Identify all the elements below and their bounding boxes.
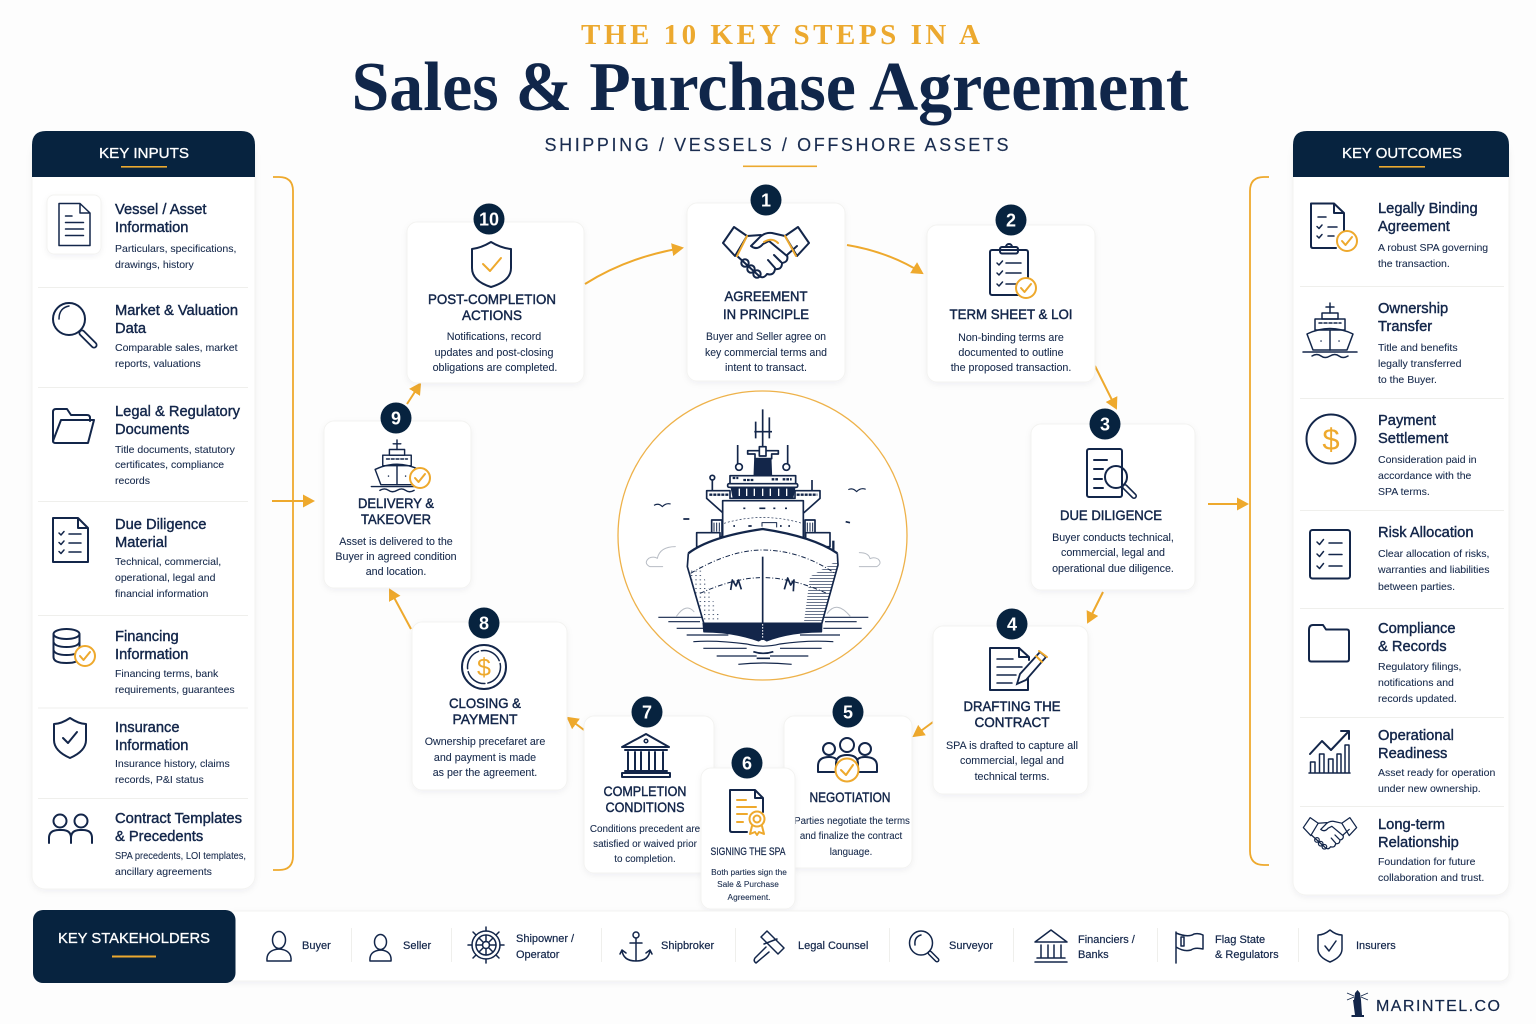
- input: market valuation data: [53, 303, 238, 370]
- step 4: drafting the contract: DRAFTING THE: [964, 698, 1060, 714]
- inputs header: [32, 131, 255, 177]
- title block: [352, 19, 1188, 167]
- input: due diligence material: Technical, commercial,: [115, 556, 221, 568]
- step 9: delivery and takeover: TAKEOVER: [361, 511, 431, 527]
- input: due diligence material: operational, legal and: [115, 572, 216, 584]
- outcome: compliance records: Regulatory filings,: [1378, 661, 1461, 673]
- outcome: compliance records: [1309, 621, 1461, 705]
- stakeholder: financiers banks: Financiers /: [1078, 934, 1136, 946]
- step 3: due diligence: 3: [1100, 414, 1110, 434]
- stakeholder: seller: [370, 934, 431, 961]
- icon: coin: $: [477, 654, 491, 682]
- step 7: completion conditions: CONDITIONS: [606, 799, 684, 815]
- outcome: legally binding agreement: Agreement: [1378, 219, 1450, 235]
- step 6: signing the spa: 6: [742, 754, 752, 774]
- icon: bank building: [622, 734, 670, 777]
- step 5: negotiation: Parties negotiate the terms: [794, 816, 910, 827]
- main title: Sales & Purchase Agreement: [352, 49, 1188, 126]
- step 4: drafting the contract: 4: [1007, 614, 1017, 634]
- input: insurance information: Insurance: [115, 720, 180, 736]
- stakeholder: flag state regulators: Flag State: [1215, 934, 1265, 946]
- step 2: term sheet and loi: the proposed transaction.: [951, 362, 1071, 374]
- outcomes header: KEY OUTCOMES: [1342, 146, 1462, 162]
- step 9: delivery and takeover: 9: [391, 408, 401, 428]
- input: insurance information: records, P&I status: [115, 774, 204, 786]
- outcome: operational readiness: Operational: [1378, 728, 1454, 744]
- stakeholder: shipowner operator: Shipowner /: [516, 933, 575, 945]
- stakeholders label: [33, 910, 236, 983]
- arrow: step 2 to 3: [1095, 366, 1116, 408]
- arrow: step 9 to 10: [407, 384, 420, 404]
- input: vessel asset information: Information: [115, 220, 188, 236]
- outcome: legally binding agreement: Legally Binding: [1378, 201, 1478, 217]
- step 7: completion conditions: [584, 696, 714, 873]
- outcome: long-term relationship: Long-term: [1378, 817, 1445, 833]
- icon: shield check: [472, 242, 511, 287]
- outcome: payment settlement: Consideration paid in: [1378, 454, 1477, 466]
- input: due diligence material: Material: [115, 535, 167, 551]
- step 1: agreement in principle: 1: [761, 190, 771, 210]
- step 2: term sheet and loi: [927, 204, 1095, 382]
- step 3: due diligence: operational due diligence.: [1052, 563, 1174, 575]
- outcome: ownership transfer: legally transferred: [1378, 358, 1462, 370]
- step 10: post-completion actions: updates and post-closing: [435, 347, 553, 359]
- outcome: ownership transfer: to the Buyer.: [1378, 374, 1437, 386]
- input: legal regulatory documents: records: [115, 475, 150, 487]
- stakeholder: legal counsel: Legal Counsel: [798, 940, 868, 952]
- input: legal regulatory documents: Title documents, statutory: [115, 444, 236, 456]
- step 2: term sheet and loi: TERM SHEET & LOI: [950, 306, 1072, 322]
- outcome: ownership transfer: Ownership: [1378, 301, 1448, 317]
- outcome: compliance records: notifications and: [1378, 677, 1454, 689]
- input: vessel asset information: [47, 195, 236, 271]
- icon: group with check: [818, 738, 877, 782]
- input: vessel asset information: Vessel / Asset: [115, 202, 206, 218]
- step 9: delivery and takeover: [324, 402, 471, 588]
- stakeholder: shipbroker: [620, 932, 715, 961]
- step 8: closing and payment: PAYMENT: [452, 711, 518, 727]
- input: legal regulatory documents: [53, 404, 241, 487]
- outcome: payment settlement: Payment: [1378, 413, 1436, 429]
- step 2: term sheet and loi: Non-binding terms are: [958, 332, 1064, 344]
- step 3: due diligence: DUE DILIGENCE: [1060, 507, 1162, 523]
- input: legal regulatory documents: certificates, compliance: [115, 459, 224, 471]
- step 6: signing the spa: [701, 748, 795, 909]
- logo: marintel: [1347, 990, 1500, 1017]
- step 8: closing and payment: Ownership precefaret are: [425, 736, 545, 748]
- stakeholder: insurers: [1318, 930, 1396, 962]
- stakeholder: surveyor: [910, 931, 993, 960]
- step 9: delivery and takeover: Buyer in agreed condition: [335, 551, 457, 563]
- step 5: negotiation: 5: [843, 702, 853, 722]
- step 5: negotiation: language.: [830, 847, 872, 858]
- input: legal regulatory documents: Legal & Regulatory: [115, 404, 241, 420]
- step 1: agreement in principle: key commercial terms and: [705, 347, 827, 359]
- step 5: negotiation: and finalize the contract: [800, 831, 902, 842]
- arrow: step 1 to 2: [847, 245, 922, 273]
- input: financing information: Information: [115, 647, 188, 663]
- bracket: process to outcomes: [1208, 177, 1269, 865]
- step 10: post-completion actions: obligations are completed.: [433, 362, 557, 374]
- input: due diligence material: [53, 517, 221, 600]
- step 7: completion conditions: to completion.: [614, 854, 676, 865]
- panel: key outcomes: [1293, 131, 1509, 895]
- icon: handshake: [723, 227, 809, 278]
- step 6: signing the spa: Both parties sign the: [711, 867, 787, 877]
- step 2: term sheet and loi: 2: [1006, 210, 1016, 230]
- outcome: payment settlement: SPA terms.: [1378, 486, 1430, 498]
- stakeholder: flag state regulators: & Regulators: [1215, 949, 1279, 961]
- step 10: post-completion actions: 10: [479, 210, 499, 230]
- icon: coin: [462, 645, 506, 689]
- stakeholder: shipowner operator: [468, 927, 575, 963]
- step 7: completion conditions: satisfied or waived prior: [593, 839, 698, 850]
- step 6: signing the spa: Agreement.: [728, 892, 770, 902]
- step 1: agreement in principle: IN PRINCIPLE: [723, 306, 809, 322]
- subtitle: SHIPPING / VESSELS / OFFSHORE ASSETS: [544, 135, 1008, 155]
- step 10: post-completion actions: Notifications, record: [447, 331, 541, 343]
- input: contract templates precedents: [49, 811, 246, 878]
- input: market valuation data: Data: [115, 321, 147, 337]
- input: financing information: Financing terms, bank: [115, 668, 219, 680]
- step 8: closing and payment: 8: [479, 614, 489, 634]
- icon: ship with check: [371, 440, 430, 492]
- outcome: legally binding agreement: A robust SPA governing: [1378, 242, 1488, 254]
- step 8: closing and payment: [412, 608, 567, 790]
- central ship illustration: [618, 391, 907, 680]
- panel: key inputs: [32, 131, 255, 889]
- step 6: signing the spa: SIGNING THE SPA: [710, 846, 786, 858]
- outcome: legally binding agreement: [1311, 201, 1488, 270]
- input: vessel asset information: drawings, history: [115, 259, 195, 271]
- arrow: step 8 to 9: [390, 590, 411, 629]
- outcome: compliance records: Compliance: [1378, 621, 1456, 637]
- step 7: completion conditions: Conditions precedent are: [590, 824, 701, 835]
- input: contract templates precedents: ancillary agreements: [115, 866, 212, 878]
- input: contract templates precedents: & Precedents: [115, 829, 203, 845]
- input: legal regulatory documents: Documents: [115, 422, 189, 438]
- step 5: negotiation: [784, 696, 912, 868]
- step 7: completion conditions: COMPLETION: [604, 783, 686, 799]
- step 4: drafting the contract: [933, 608, 1088, 794]
- inputs header: KEY INPUTS: [99, 146, 189, 162]
- outcome: long-term relationship: Foundation for future: [1378, 856, 1476, 868]
- input: due diligence material: Due Diligence: [115, 517, 206, 533]
- logo: marintel: MARINTEL.CO: [1376, 998, 1500, 1015]
- step 8: closing and payment: as per the agreement.: [433, 767, 537, 779]
- stakeholder: legal counsel: [754, 931, 868, 963]
- input: market valuation data: reports, valuations: [115, 358, 201, 370]
- outcome: long-term relationship: Relationship: [1378, 835, 1459, 851]
- outcome: risk allocation: Clear allocation of risks,: [1378, 548, 1489, 560]
- icon: certificate document: [730, 790, 764, 835]
- stakeholder: financiers banks: Banks: [1078, 949, 1109, 961]
- outcome: risk allocation: warranties and liabilities: [1377, 564, 1489, 576]
- input: due diligence material: financial information: [115, 588, 209, 600]
- outcome: operational readiness: under new ownership.: [1378, 783, 1481, 795]
- step 10: post-completion actions: POST-COMPLETION: [428, 291, 556, 307]
- step 1: agreement in principle: Buyer and Seller agree on: [706, 331, 826, 343]
- step 4: drafting the contract: commercial, legal and: [960, 755, 1064, 767]
- input: financing information: requirements, guarantees: [115, 684, 235, 696]
- step 1: agreement in principle: intent to transact.: [725, 362, 807, 374]
- stakeholders label: KEY STAKEHOLDERS: [58, 931, 210, 947]
- input: financing information: [54, 629, 235, 696]
- input: contract templates precedents: SPA precedents, LOI templates,: [115, 850, 246, 862]
- step 6: signing the spa: Sale & Purchase: [717, 879, 779, 889]
- outcome: payment settlement: [1306, 413, 1477, 498]
- input: insurance information: Information: [115, 738, 188, 754]
- outcomes header: [1293, 131, 1509, 177]
- outcome: ownership transfer: Transfer: [1378, 319, 1432, 335]
- step 8: closing and payment: CLOSING &: [449, 695, 522, 711]
- outcome: payment settlement: $: [1322, 422, 1340, 457]
- step 5: negotiation: NEGOTIATION: [810, 789, 890, 805]
- arrow: step 10 to 1: [585, 248, 682, 284]
- stakeholder: insurers: Insurers: [1356, 940, 1396, 952]
- step 9: delivery and takeover: Asset is delivered to the: [339, 536, 453, 548]
- eyebrow heading: THE 10 KEY STEPS IN A: [581, 19, 980, 51]
- step 2: term sheet and loi: documented to outline: [958, 347, 1064, 359]
- stakeholder: shipowner operator: Operator: [516, 949, 560, 961]
- step 4: drafting the contract: technical terms.: [975, 771, 1049, 783]
- stakeholder: surveyor: Surveyor: [949, 940, 993, 952]
- step 3: due diligence: commercial, legal and: [1061, 547, 1165, 559]
- step 10: post-completion actions: ACTIONS: [462, 307, 522, 323]
- step 10: post-completion actions: [407, 204, 584, 383]
- bracket: inputs to process: [272, 177, 313, 870]
- outcome: risk allocation: [1310, 525, 1489, 593]
- outcome: operational readiness: Readiness: [1378, 746, 1447, 762]
- stakeholder: buyer: Buyer: [302, 940, 331, 952]
- outcome: operational readiness: [1309, 728, 1495, 795]
- stakeholder: financiers banks: [1035, 930, 1136, 962]
- step 1: agreement in principle: AGREEMENT: [724, 288, 808, 304]
- outcome: compliance records: & Records: [1378, 639, 1447, 655]
- outcome: long-term relationship: collaboration and trust.: [1378, 872, 1484, 884]
- stakeholders band: [33, 910, 1509, 983]
- stakeholder: shipbroker: Shipbroker: [661, 940, 715, 952]
- step 9: delivery and takeover: DELIVERY &: [358, 495, 435, 511]
- outcome: compliance records: records updated.: [1378, 693, 1457, 705]
- stakeholder: flag state regulators: [1176, 932, 1279, 963]
- arrow: step 3 to 4: [1088, 592, 1103, 622]
- outcome: ownership transfer: [1303, 301, 1462, 386]
- step 3: due diligence: [1031, 408, 1195, 590]
- step 9: delivery and takeover: and location.: [366, 566, 426, 578]
- outcome: operational readiness: Asset ready for operation: [1378, 767, 1495, 779]
- icon: clipboard: [990, 244, 1036, 298]
- stakeholder: seller: Seller: [403, 940, 431, 952]
- input: vessel asset information: Particulars, specifications,: [115, 243, 236, 255]
- step 4: drafting the contract: CONTRACT: [974, 714, 1050, 730]
- step 3: due diligence: Buyer conducts technical,: [1052, 532, 1174, 544]
- outcome: payment settlement: accordance with the: [1378, 470, 1472, 482]
- input: insurance information: Insurance history, claims: [115, 758, 230, 770]
- stakeholder: buyer: [267, 932, 331, 961]
- input: market valuation data: Comparable sales, market: [115, 342, 238, 354]
- outcome: ownership transfer: Title and benefits: [1378, 342, 1458, 354]
- outcome: risk allocation: between parties.: [1378, 581, 1455, 593]
- input: financing information: Financing: [115, 629, 179, 645]
- icon: document with magnifier: [1087, 449, 1134, 497]
- input: insurance information: [54, 718, 230, 786]
- input: contract templates precedents: Contract Templates: [115, 811, 242, 827]
- input: market valuation data: Market & Valuation: [115, 303, 238, 319]
- outcome: long-term relationship: [1303, 817, 1484, 884]
- step 7: completion conditions: 7: [642, 702, 652, 722]
- step 8: closing and payment: and payment is made: [434, 752, 536, 764]
- outcome: payment settlement: Settlement: [1378, 431, 1448, 447]
- arrow: step 7 to 8: [568, 718, 584, 730]
- arrow: step 4 to 5: [914, 722, 933, 736]
- outcome: legally binding agreement: the transaction.: [1378, 258, 1450, 270]
- outcome: risk allocation: Risk Allocation: [1378, 525, 1474, 541]
- step 4: drafting the contract: SPA is drafted to capture all: [946, 740, 1078, 752]
- step 1: agreement in principle: [687, 184, 845, 381]
- icon: document with pen: [990, 648, 1047, 690]
